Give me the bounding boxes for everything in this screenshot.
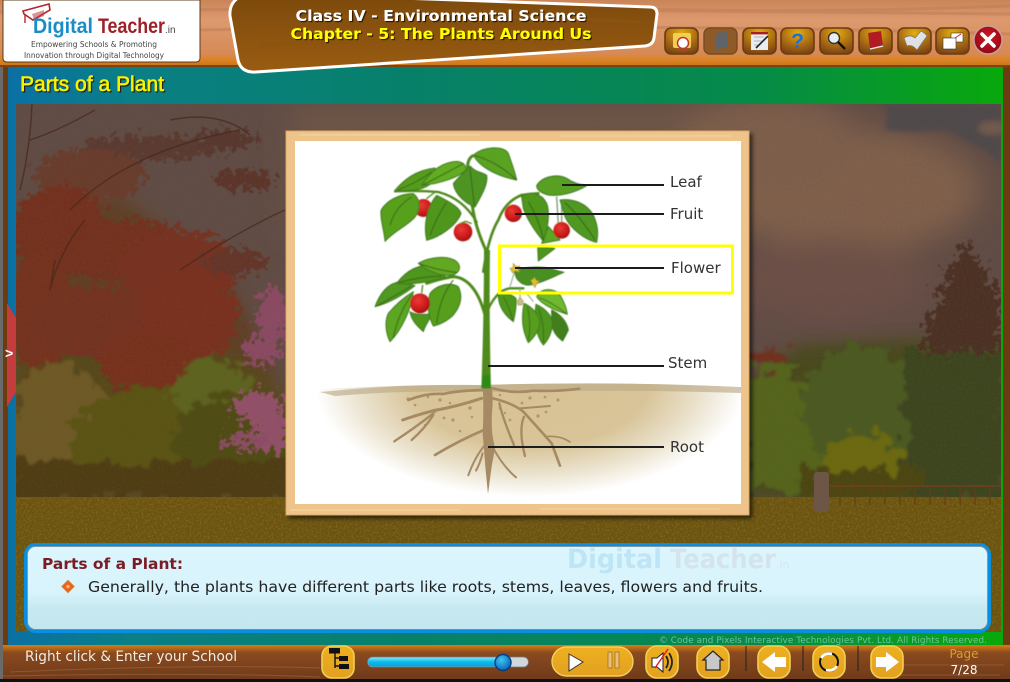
watermark: Digital — [567, 544, 662, 575]
tree branches — [20, 104, 285, 290]
label lines — [488, 185, 664, 447]
upper left branch — [381, 156, 487, 252]
roots — [394, 387, 579, 494]
right tree line — [743, 345, 1005, 500]
button: home — [697, 646, 729, 678]
chapter title plaque — [230, 0, 657, 72]
lower right branch — [485, 263, 568, 345]
diagram frame — [286, 131, 749, 515]
background landscape photo — [8, 95, 1006, 637]
logo wordmark: Digital — [33, 15, 93, 38]
button: previous — [758, 646, 790, 678]
label: Leaf: Leaf — [670, 173, 703, 191]
fence and post — [814, 472, 1001, 512]
lower left branch — [375, 257, 485, 342]
main stem — [481, 250, 491, 388]
button: mute sound — [646, 646, 678, 678]
left side slide-out tab — [5, 303, 16, 407]
label: Stem: Stem — [668, 354, 707, 372]
ground yellow speckle — [16, 497, 1001, 637]
plant — [375, 148, 598, 388]
copyright: © Code and Pixels Interactive Technologies Pvt. Ltd. All Rights Reserved. — [659, 636, 987, 646]
watermark: Teacher — [670, 544, 777, 575]
label: Root: Root — [670, 438, 704, 456]
logo card: .in — [165, 25, 176, 36]
info text box — [26, 544, 990, 632]
page label: Page — [949, 647, 979, 661]
soil mound — [320, 383, 741, 494]
header wood bar — [0, 0, 1010, 67]
button: notepad — [743, 28, 776, 54]
pink blossom tree — [223, 286, 290, 452]
button dividers — [746, 646, 858, 671]
label: Flower: Flower — [671, 259, 721, 277]
button: close — [974, 26, 1002, 54]
soil speckles — [406, 394, 560, 432]
logo card: Innovation through Digital Technology — [24, 50, 164, 60]
highlight box: flower — [500, 246, 732, 293]
button: help: ? — [791, 30, 804, 53]
red tree canopy — [8, 130, 275, 396]
footer bar — [0, 645, 1010, 682]
button: reference book — [704, 28, 737, 54]
conifer — [918, 238, 1001, 352]
photo grain — [43, 107, 1001, 497]
button: timer folder — [665, 28, 698, 54]
tree mass backing — [10, 195, 1005, 500]
play and pause control — [552, 647, 633, 676]
logo card — [3, 0, 200, 62]
class title: Class IV - Environmental Science — [296, 7, 586, 25]
button: window resize — [936, 28, 969, 54]
toolbar icons — [665, 26, 1002, 54]
school label: Right click & Enter your School — [25, 649, 237, 665]
watermark: .in — [776, 558, 790, 571]
top leaf — [473, 148, 517, 180]
button: contents tree — [322, 646, 354, 678]
button: next — [871, 646, 903, 678]
icon: graduation cap — [23, 4, 50, 23]
button: dictionary — [859, 28, 892, 54]
section heading: Parts of a Plant — [20, 73, 164, 96]
logo tagline: Empowering Schools & Promoting — [31, 39, 157, 49]
page number: 7/28 — [951, 663, 977, 677]
progress slider — [368, 654, 528, 670]
ground — [16, 497, 1001, 637]
logo card: Teacher — [98, 15, 165, 38]
info heading: Parts of a Plant: — [42, 555, 183, 573]
flowers — [510, 263, 540, 305]
sky clouds — [290, 95, 980, 320]
button: replay — [813, 646, 845, 678]
button: help — [781, 28, 814, 54]
info body: Generally, the plants have different parts like roots, stems, leaves, flowers and fruits. — [88, 578, 763, 596]
button: magnifier — [820, 28, 853, 54]
button: open book — [898, 28, 931, 54]
watermark — [567, 544, 790, 575]
left side slide-out tab: > — [5, 345, 13, 361]
bullet icon — [62, 580, 74, 593]
treeline foliage left — [10, 361, 295, 500]
upper right branch — [483, 176, 598, 272]
chapter title: Chapter - 5: The Plants Around Us — [290, 25, 592, 43]
label: Fruit: Fruit — [670, 205, 703, 223]
